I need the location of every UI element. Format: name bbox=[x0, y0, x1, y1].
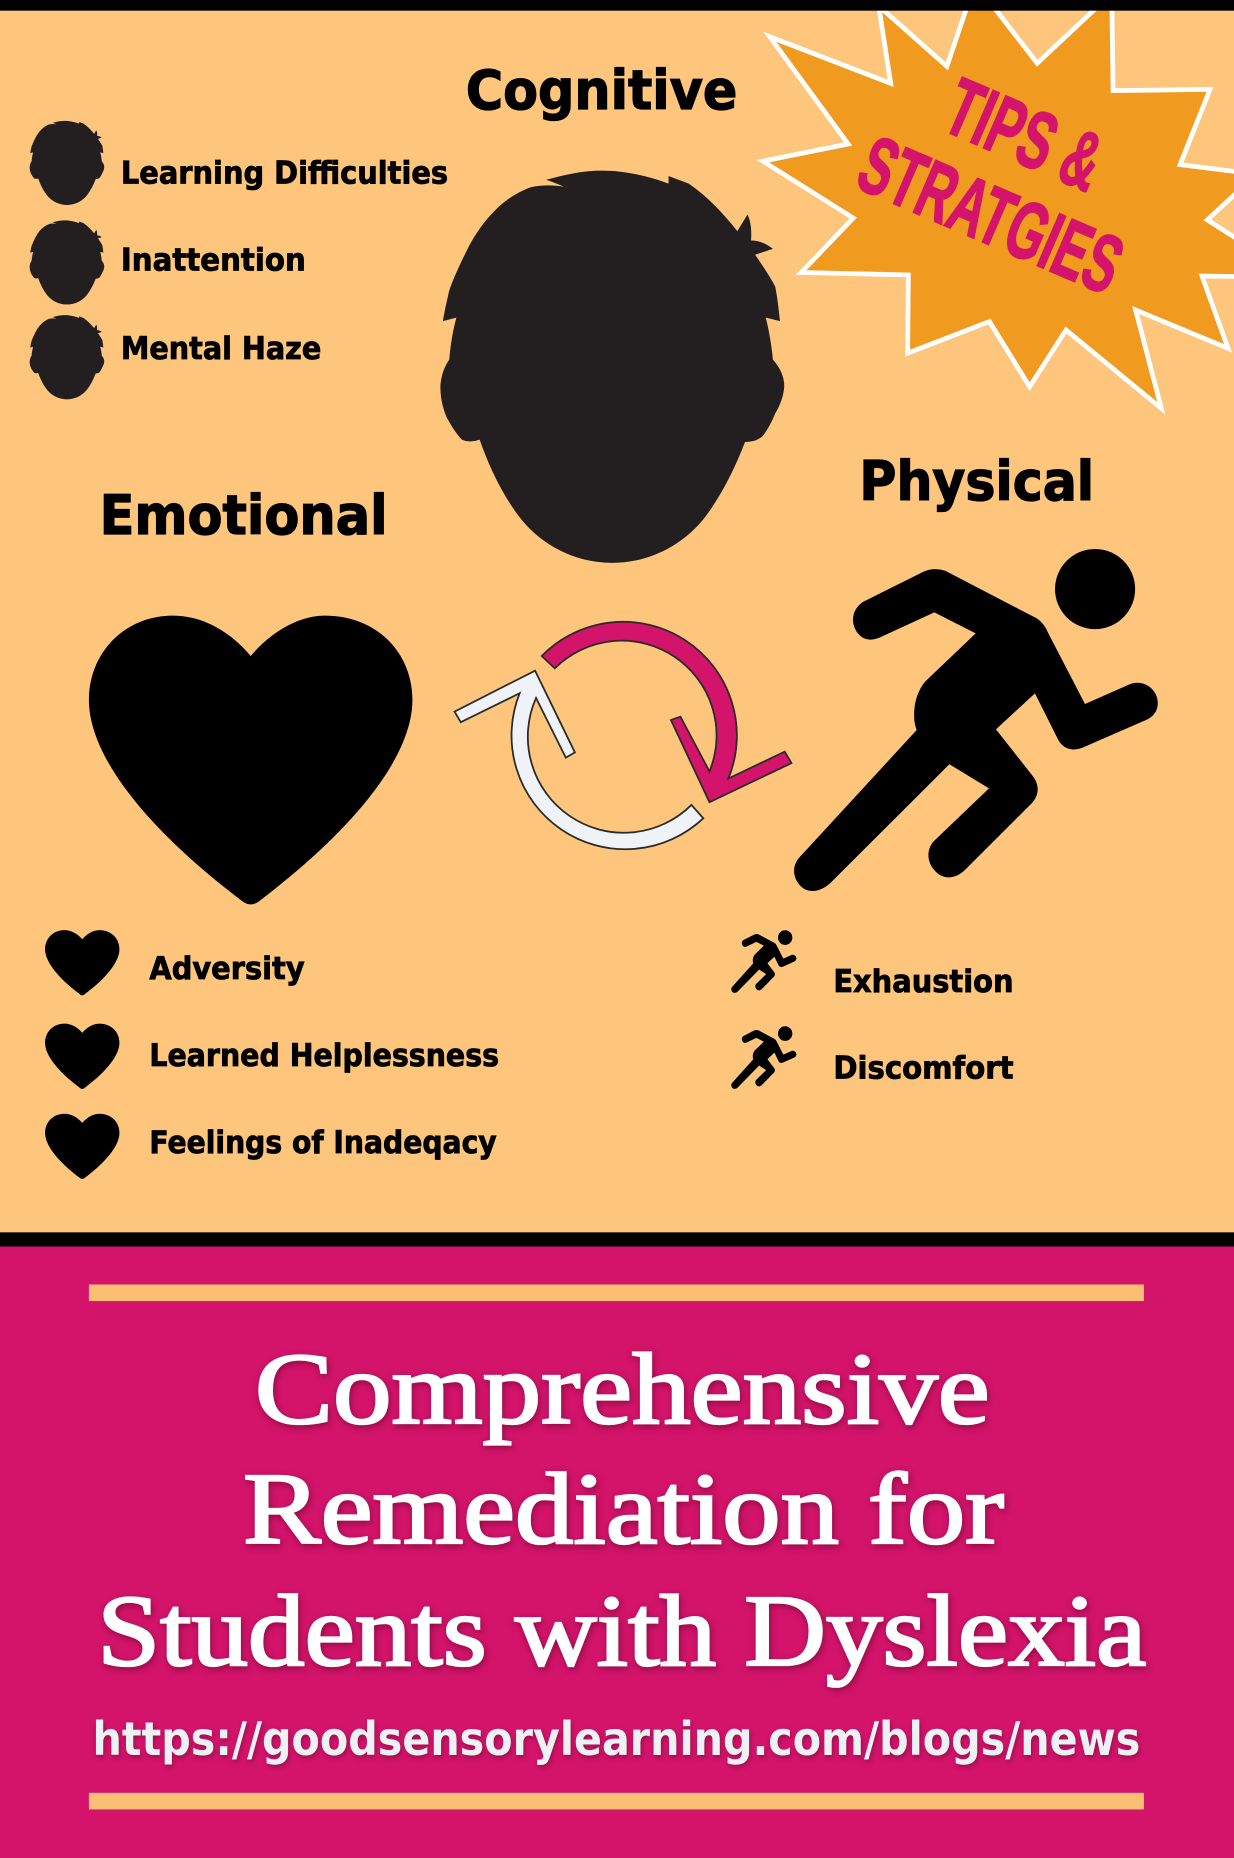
label: Learning Difficulties: Learning Difficulties bbox=[121, 156, 448, 192]
label: Exhaustion: Exhaustion bbox=[833, 964, 1014, 1000]
label: Feelings of Inadeqacy: Feelings of Inadeqacy bbox=[149, 1125, 497, 1161]
icon: small runner 2 bbox=[731, 1026, 796, 1089]
title line 1: Comprehensive bbox=[255, 1333, 990, 1446]
label: Inattention: Inattention bbox=[121, 243, 306, 279]
url: https://goodsensorylearning.com/blogs/news bbox=[92, 1712, 1140, 1766]
arrow: pink cycle arrow bbox=[542, 622, 791, 802]
title bbox=[97, 1333, 1146, 1688]
heading: Emotional: Emotional bbox=[100, 483, 388, 547]
icon: small heart 3 bbox=[45, 1114, 119, 1179]
starburst: tips and strategies bbox=[763, 6, 1234, 408]
label: Discomfort: Discomfort bbox=[833, 1050, 1014, 1086]
icon: small runner 1 bbox=[731, 930, 796, 993]
top black bar bbox=[0, 0, 1234, 11]
panel: pink title band bbox=[0, 1247, 1234, 1858]
icon: large runner bbox=[794, 549, 1158, 891]
icon: small heart 1 bbox=[45, 930, 119, 995]
icon: small head 1 bbox=[30, 121, 104, 205]
top stripe bbox=[89, 1284, 1144, 1301]
icon: large head silhouette bbox=[440, 171, 784, 563]
heading: Physical: Physical bbox=[859, 449, 1094, 513]
icon: large heart bbox=[89, 616, 412, 904]
bottom stripe bbox=[89, 1793, 1144, 1809]
starburst text: TIPS &: TIPS & bbox=[932, 62, 1116, 209]
label: Learned Helplessness: Learned Helplessness bbox=[149, 1038, 499, 1074]
arrow: white cycle arrow bbox=[455, 671, 703, 849]
label: Adversity: Adversity bbox=[149, 951, 305, 987]
icon: small heart 2 bbox=[45, 1024, 119, 1089]
label: Mental Haze: Mental Haze bbox=[121, 331, 321, 367]
black divider bar bbox=[0, 1232, 1234, 1247]
icon: small head 2 bbox=[30, 220, 104, 305]
heading: Cognitive: Cognitive bbox=[466, 58, 737, 122]
title line 2: Remediation for bbox=[243, 1453, 1004, 1566]
icon: small head 3 bbox=[30, 315, 104, 399]
panel: peach background bbox=[0, 0, 1234, 1235]
title line 3: Students with Dyslexia bbox=[97, 1575, 1146, 1688]
